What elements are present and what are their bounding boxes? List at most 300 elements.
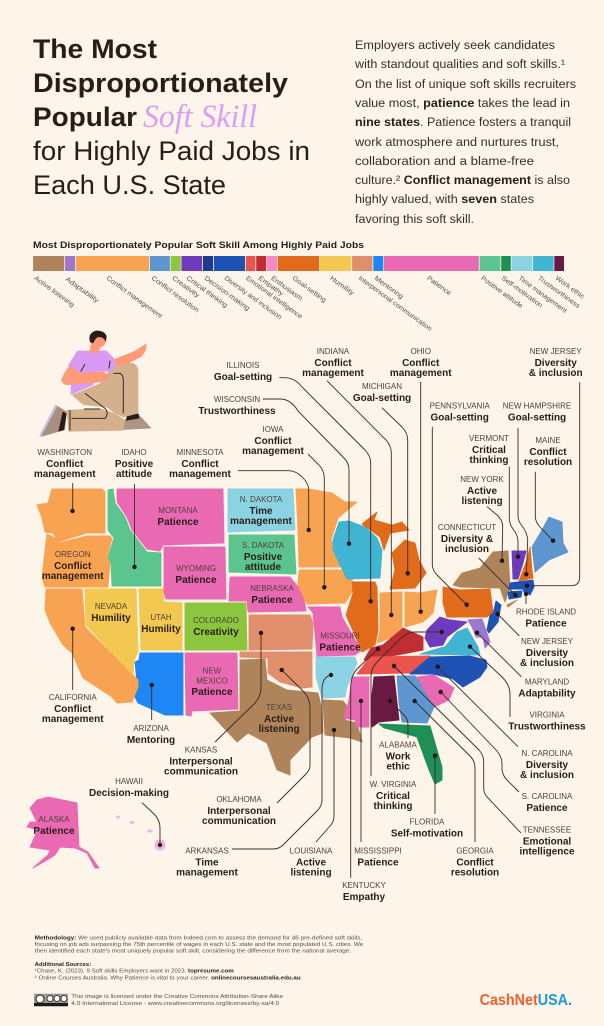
state: New York [453,551,510,602]
label: Wyoming: WYOMING [176,564,216,573]
license text: 4.0 International License - www.creativecommons.org/licenses/by-sa/4.0 [71,1001,279,1007]
bar chart category labels: Critical thinking [185,275,229,310]
leader: Vermont [509,467,520,559]
bar chart category labels: Self-motivation [500,275,544,310]
leader: Wisconsin [263,399,351,546]
label: Missouri: Patience [319,643,361,654]
label: Mississippi [354,847,402,869]
state: Pennsylvania [443,587,493,617]
label: Tennessee: Emotional [523,837,571,848]
label: New Jersey south: NEW JERSEY [521,637,574,646]
state: Wisconsin [333,521,382,579]
label: Alabama: ALABAMA [379,741,418,750]
label: Alaska: Patience [33,826,75,837]
label: Indiana: Conflict [314,358,352,369]
leader: Georgia [412,699,475,842]
intro paragraph: highly valued, with seven states [355,192,534,206]
bar chart category labels: Mentoring [373,275,405,301]
state: Idaho [108,489,161,586]
label: South Carolina [522,792,573,814]
bar chart category labels: Patience [425,275,452,297]
label: Hawaii [89,777,169,799]
label: California: management [42,714,104,725]
state: Maine [532,517,568,572]
label: Arizona [127,724,175,746]
label: Alabama: Work [386,752,411,763]
label: New Jersey south: Diversity [526,648,569,659]
bar chart heading: Most Disproportionately Popular Soft Skill Among Highly Paid Jobs [33,240,364,251]
leader: Connecticut [479,558,518,597]
license text [71,994,283,1007]
label: Connecticut: Diversity & [441,534,493,545]
leader: New Jersey south [496,612,519,636]
label: Pennsylvania: Goal-setting [431,413,489,424]
label: California: Conflict [54,704,92,715]
state: North Carolina [410,656,487,687]
leader: Arkansas [232,673,333,849]
label: Kansas [164,746,238,778]
label: New Jersey north: NEW JERSEY [530,347,582,356]
label: Idaho: IDAHO [121,448,147,457]
label: Minnesota: MINNESOTA [177,448,224,457]
leader: Tennessee [392,664,521,833]
label: West Virginia: thinking [374,801,412,812]
label: Oregon: Conflict [54,561,92,572]
label: Texas [258,703,300,735]
label: Tennessee: intelligence [519,847,575,858]
bar chart category labels: Emotional intelligence [244,275,304,321]
label: South Dakota: S. DAKOTA [242,541,285,550]
state: Tennessee [357,656,430,674]
label: South Dakota: Positive [244,552,283,563]
label: Kansas: Interpersonal [169,757,233,768]
bar chart category labels: Diversity and inclusion [223,275,283,321]
label: Kentucky [342,881,386,903]
icon: creative commons badge [34,994,68,1006]
label: Washington [34,448,96,480]
label: Minnesota: Conflict [181,459,219,470]
label: Indiana: management [302,368,365,379]
title: for Highly Paid Jobs in [33,136,310,166]
leader: Kentucky [351,647,380,878]
label: Hawaii: HAWAII [115,777,143,786]
label: Maryland: MARYLAND [525,678,569,687]
label: West Virginia [370,780,417,812]
label: New Jersey south: & inclusion [520,658,574,669]
label: Louisiana: Active [296,858,326,869]
label: Maryland: Adaptability [518,689,576,700]
label: Georgia [451,847,499,879]
leader: Virginia [468,644,510,717]
logo: CashNetUSA: CashNetUSA. [480,992,572,1009]
label: Utah: UTAH [150,613,172,622]
label: Montana: MONTANA [158,506,198,515]
label: New Hampshire: Goal-setting [508,413,566,424]
label: Iowa: management [242,446,305,457]
leader: Indiana [327,381,393,617]
label: Vermont: VERMONT [469,434,509,443]
label: New Mexico: MEXICO [196,677,228,686]
illustration: kneeling person pointing [39,331,152,437]
label: New Hampshire [503,402,571,424]
label: South Carolina: S. CAROLINA [522,792,573,801]
state: Arkansas [316,657,357,698]
leader: Alabama [388,699,408,738]
label: South Dakota [242,541,285,573]
leader: New York [487,507,504,563]
title: The Most [33,34,157,64]
label: Connecticut [438,523,496,555]
state: Texas [210,659,323,775]
label: Connecticut: inclusion [445,544,489,555]
label: Wyoming: Patience [175,575,217,586]
bar chart category labels: Conflict management [105,275,163,320]
state: Massachusetts area [509,580,534,595]
intro paragraph: On the list of unique soft skills recruiters [355,77,576,91]
state: South Carolina [417,675,454,707]
state: Florida [379,724,442,784]
label: Wisconsin: WISCONSIN [214,395,260,404]
leader: Louisiana [316,728,336,842]
label: Idaho: Positive [115,459,154,470]
label: Tennessee: TENNESSEE [523,826,571,835]
label: West Virginia: W. VIRGINIA [370,780,417,789]
label: Michigan [353,382,411,404]
leader: Kansas [215,631,263,742]
label: Oklahoma: OKLAHOMA [216,795,262,804]
intro paragraph [354,38,576,226]
intro paragraph: collaboration and a blame-free [355,154,534,168]
label: Louisiana: LOUISIANA [290,847,333,856]
state: New Jersey [487,601,501,633]
label: North Carolina: & inclusion [520,770,574,781]
label: Texas: listening [258,724,300,735]
label: Alabama: ethic [386,762,410,773]
label: Florida: Self-motivation [391,829,463,840]
leader: South Carolina [438,690,519,792]
state: Alaska [27,797,99,868]
label: Georgia: Conflict [456,858,494,869]
state: Michigan lower [390,540,426,589]
label: North Carolina: Diversity [526,760,569,771]
state: Maryland [468,619,490,648]
state: New Hampshire [519,547,533,581]
label: Vermont [469,434,509,466]
state: West Virginia [425,617,467,647]
label: Missouri: MISSOURI [320,632,360,641]
methodology text: focusing on job ads surpassing the 75th percentile of wages in each U.S. state and the most populated U.S. cities. We [35,942,363,948]
label: Utah [141,613,181,635]
bar chart category labels: Positive attitude [479,275,524,310]
label: Nevada: Humility [91,613,131,624]
label: Virginia [508,711,586,733]
label: New Hampshire: NEW HAMPSHIRE [503,402,571,411]
leader: Rhode Island [524,592,528,604]
state: Kansas [249,615,313,650]
label: New Mexico: NEW [203,667,222,676]
stacked bar chart [33,256,564,271]
label: Kansas: communication [164,767,238,778]
label: Oklahoma [202,795,276,827]
label: Louisiana [290,847,333,879]
state: Connecticut [508,591,522,599]
label: Pennsylvania [430,402,490,424]
label: Illinois [214,361,272,383]
label: Wisconsin: Trustworthiness [198,406,276,417]
US map [27,489,568,868]
label: Virginia: VIRGINIA [529,711,565,720]
label: Iowa: IOWA [262,425,284,434]
label: Rhode Island: Patience [525,619,567,630]
label: Montana [157,506,199,528]
label: Vermont: thinking [470,455,508,466]
label: North Carolina [520,749,574,781]
label: Maine: resolution [524,457,572,468]
label: Rhode Island [516,608,576,630]
additional sources [35,962,301,981]
leader: Oklahoma [277,668,310,803]
label: North Dakota: management [230,516,293,527]
bar chart category labels: Active listening [33,275,76,309]
label: Georgia: GEORGIA [456,847,494,856]
label: Hawaii: Decision-making [89,788,169,799]
state: Kentucky [364,628,423,660]
label: Washington: management [34,469,96,480]
label: Idaho: attitude [116,469,152,480]
label: Iowa [242,425,305,457]
intro paragraph: value most, patience takes the lead in [355,96,570,110]
label: New Jersey south [520,637,574,669]
bar chart category labels: Enthusiasm [269,275,304,303]
leader: Hawaii [142,803,162,847]
label: Nebraska: Patience [251,595,293,606]
label: South Carolina: Patience [526,803,568,814]
label: Maine: Conflict [529,447,567,458]
label: Ohio: Conflict [402,358,440,369]
label: Washington: WASHINGTON [37,448,92,457]
label: North Dakota: Time [249,506,273,517]
label: New York: Active [467,486,497,497]
intro paragraph: with standout qualities and soft skills.¹ [354,57,565,71]
bar chart category labels: Time management [517,275,568,315]
state: Missouri [308,607,362,656]
label: Iowa: Conflict [254,436,292,447]
label: Georgia: resolution [451,868,499,879]
leader: Washington [70,483,75,513]
label: Oregon: OREGON [55,550,91,559]
state: Alabama [371,676,399,727]
leader: Ohio [418,382,423,614]
label: Pennsylvania: PENNSYLVANIA [430,402,490,411]
label: Ohio: OHIO [410,347,431,356]
label: Colorado: COLORADO [193,616,239,625]
leader: Mississippi [359,699,363,842]
label: Nevada: NEVADA [95,602,128,611]
additional sources: ¹Chase, K. (2023). 9 Soft skills Employers want in 2023. topresume.com [35,969,234,975]
label: Florida: FLORIDA [410,818,445,827]
leader: Maryland [475,630,521,677]
label: Virginia: Trustworthiness [508,722,586,733]
leader lines [70,378,580,878]
methodology text [35,936,363,955]
label: Vermont: Critical [472,445,506,456]
label: Illinois: ILLINOIS [227,361,259,370]
label: West Virginia: Critical [376,791,410,802]
label: Alaska: ALASKA [38,815,70,824]
label: Indiana: INDIANA [317,347,350,356]
label: Ohio: management [390,368,452,379]
state: Michigan upper [362,512,409,550]
label: North Carolina: N. CAROLINA [521,749,573,758]
label: Minnesota [169,448,232,480]
label: Idaho [115,448,154,480]
label: California [42,693,104,725]
label: Alaska [33,815,75,837]
label: Wyoming [175,564,217,586]
intro paragraph: work atmosphere and nurtures trust, [354,135,559,149]
leader: New Hampshire [518,428,528,576]
state: Hawaii islands [116,816,166,850]
state: Arizona [135,653,183,715]
label: Oklahoma: Interpersonal [207,806,271,817]
leader: Florida [433,754,437,814]
additional sources: Additional Sources: [35,962,91,968]
bar chart category labels: Work ethic [554,275,586,301]
label: Maryland [518,678,576,700]
label: Mississippi: MISSISSIPPI [354,847,402,856]
label: New York: NEW YORK [460,475,504,484]
label: Arizona: ARIZONA [133,724,169,733]
label: Oregon [42,550,104,582]
leader: Idaho [132,484,137,569]
title: Disproportionately [33,68,288,98]
state: New Mexico [185,653,238,716]
bar chart category labels: Interpersonal communication [357,275,433,333]
label: New Mexico: Patience [191,687,233,698]
label: Tennessee [519,826,575,858]
state: Vermont [512,551,526,579]
leader: Arizona [150,683,154,720]
label: Kentucky: Empathy [343,892,386,903]
intro paragraph: nine states. Patience fosters a tranquil [355,115,571,129]
bar chart category labels: Decision-making [203,275,251,313]
title: Each U.S. State [33,170,226,200]
label: Michigan: MICHIGAN [362,382,402,391]
leader: Michigan [382,408,410,576]
state: Georgia [397,676,434,723]
bar chart category labels: Goal-setting [291,275,328,304]
label: Nevada [91,602,131,624]
label: Minnesota: management [169,469,232,480]
state: Nebraska [229,577,306,612]
label: Arkansas: ARKANSAS [185,847,229,856]
state: Iowa [298,570,355,604]
state: Colorado [185,603,247,650]
leader: Iowa [308,454,326,590]
label: California: CALIFORNIA [49,693,97,702]
state: North Dakota [228,489,295,532]
state: Washington [37,489,105,542]
label: Florida [391,818,463,840]
state: Virginia [420,628,480,655]
state: Oregon [42,534,112,587]
label: Arkansas: Time [195,858,219,869]
state: Ohio [405,590,437,627]
state: Wyoming [164,547,226,599]
state: Louisiana [323,700,362,742]
intro paragraph: favoring this soft skill. [355,212,474,226]
state: Montana [117,489,224,551]
label: Oklahoma: communication [202,816,276,827]
label: New York [460,475,504,507]
title: Soft Skill [143,99,257,135]
license text: This image is licensed under the Creative Commons Attribution-Share Alike [71,994,283,1000]
leader: Illinois [279,378,373,604]
label: Colorado: Creativity [193,627,239,638]
label: New Mexico [191,667,233,698]
state: California [45,589,138,703]
label: North Dakota: N. DAKOTA [240,495,283,504]
bar chart category labels: Creativity [170,275,201,300]
label: Illinois: Goal-setting [214,372,272,383]
label: Rhode Island: RHODE ISLAND [516,608,576,617]
bar chart category labels: Conflict resolution [150,275,200,314]
label: Missouri [319,632,361,654]
label: Arizona: Mentoring [127,735,175,746]
leader: New Jersey north [525,382,580,588]
label: Connecticut: CONNECTICUT [438,523,496,532]
label: Texas: TEXAS [266,703,292,712]
label: Nebraska: NEBRASKA [250,584,294,593]
label: Arkansas [176,847,239,879]
label: Colorado [193,616,239,638]
state: Oklahoma [240,652,312,688]
bar chart category labels: Trustworthiness [536,275,581,310]
state: Mississippi [344,677,369,727]
leader: North Carolina [436,664,518,747]
label: Kentucky: KENTUCKY [342,881,386,890]
label: Washington: Conflict [46,459,84,470]
methodology text: then identified each state's most uniquely popular soft skill, considering the difference from the national average. [35,949,351,955]
state: Illinois [346,582,378,652]
label: Mississippi: Patience [357,858,399,869]
label: Wisconsin [198,395,276,417]
state: South Dakota [229,535,296,574]
label: South Dakota: attitude [245,562,281,573]
state: Nevada [85,589,138,675]
methodology text: Methodology: We used publicly available data from Indeed.com to assess the demand for 46 pre-defined soft skills, [35,936,362,942]
label: Louisiana: listening [290,868,332,879]
intro paragraph: Employers actively seek candidates [355,38,555,52]
bar chart category labels: Empathy [257,275,285,298]
leader: West Virginia [371,630,444,776]
state: Long Island [507,600,517,607]
label: New Jersey north: & inclusion [529,368,583,379]
leader: Minnesota [238,471,311,532]
bar chart category labels [33,275,586,333]
label: Nebraska [250,584,294,606]
label: Kansas: KANSAS [185,746,217,755]
leader: Maine [535,472,555,543]
title [33,34,310,200]
label: Oregon: management [42,571,104,582]
label: Montana: Patience [157,517,199,528]
title: Popular [33,102,138,132]
label: New Jersey north: Diversity [535,358,577,369]
additional sources: ² Online Courses Australia. Why Patience is vital to your career. onlinecoursesaustralia.edu.au [35,975,301,981]
bar chart category labels: Adaptability [64,276,100,305]
label: Texas: Active [264,714,294,725]
